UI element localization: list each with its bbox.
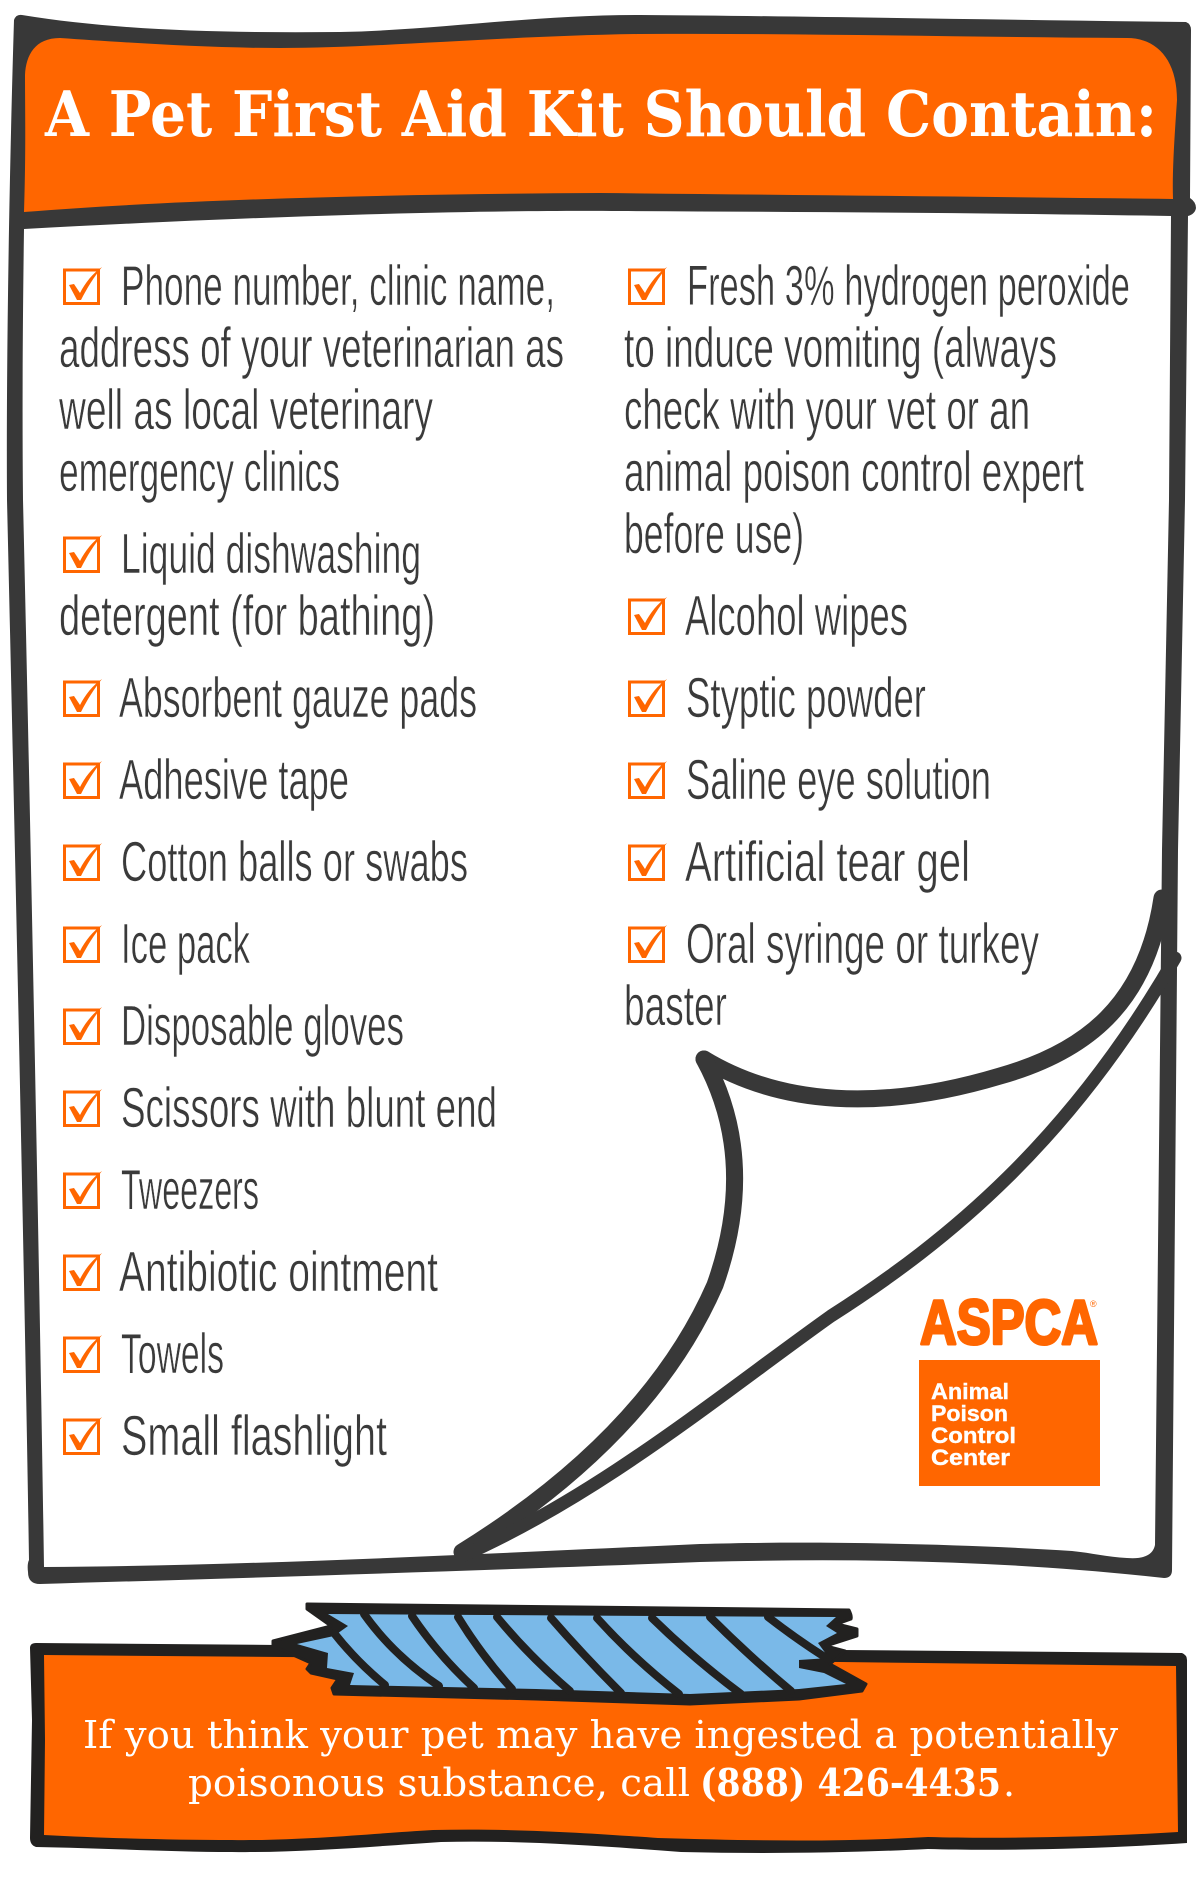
item: disposable gloves [64, 994, 404, 1058]
registered mark: ® [1090, 1299, 1097, 1309]
call-out text: poisonous substance, call [188, 1761, 690, 1805]
item: artificial tear gel [630, 830, 970, 894]
logo: ASPCA Animal Poison Control Center [919, 1288, 1100, 1486]
item: disposable gloves: Disposable gloves [121, 994, 404, 1058]
logo box text: Poison [931, 1401, 1008, 1426]
item: adhesive tape [64, 748, 349, 812]
item: cotton balls: Cotton balls or swabs [121, 830, 468, 894]
call-out text: If you think your pet may have ingested a potentially [83, 1713, 1119, 1757]
checklist: left column [58, 254, 564, 1468]
item: styptic powder: Styptic powder [686, 666, 926, 730]
item: scissors: Scissors with blunt end [121, 1076, 497, 1140]
item: ice pack: Ice pack [121, 912, 250, 976]
icon: blue masking tape [273, 1604, 866, 1704]
item: small flashlight: Small flashlight [121, 1404, 387, 1468]
item: gauze pads [64, 666, 477, 730]
item: saline eye solution [630, 748, 991, 812]
logo wordmark: ASPCA [920, 1288, 1098, 1358]
call-out text: . [1003, 1761, 1015, 1805]
item: towels [64, 1322, 224, 1386]
item: towels: Towels [121, 1322, 224, 1386]
item: scissors [64, 1076, 497, 1140]
item: phone number [58, 254, 564, 504]
item: dishwashing detergent: detergent (for bathing) [59, 584, 435, 648]
item: saline eye solution: Saline eye solution [686, 748, 991, 812]
panel: bottom call-out banner [30, 1643, 1187, 1853]
item: oral syringe [624, 912, 1039, 1038]
logo box text [931, 1379, 1016, 1470]
call-out text: (888) 426-4435 [700, 1760, 1001, 1805]
item: antibiotic ointment: Antibiotic ointment [119, 1240, 438, 1304]
item: phone number: well as local veterinary [58, 378, 433, 442]
checklist: right column [624, 254, 1130, 1038]
call-out text [83, 1713, 1119, 1805]
item: gauze pads: Absorbent gauze pads [119, 666, 477, 730]
item: tweezers: Tweezers [121, 1158, 259, 1222]
item: hydrogen peroxide: before use) [624, 502, 804, 566]
item: dishwashing detergent [59, 522, 435, 648]
item: oral syringe: baster [624, 974, 727, 1038]
item: adhesive tape: Adhesive tape [119, 748, 349, 812]
item: tweezers [64, 1158, 259, 1222]
item: phone number: Phone number, clinic name, [121, 254, 555, 318]
item: ice pack [64, 912, 250, 976]
illustration: curled page corner [462, 898, 1175, 1556]
item: artificial tear gel: Artificial tear gel [685, 830, 970, 894]
logo box text: Animal [931, 1379, 1009, 1404]
item: alcohol wipes: Alcohol wipes [685, 584, 908, 648]
panel: header banner [24, 34, 1177, 212]
item: alcohol wipes [630, 584, 908, 648]
item: hydrogen peroxide [624, 254, 1130, 566]
logo box [919, 1360, 1100, 1486]
item: phone number: emergency clinics [59, 440, 340, 504]
logo box text: Control [931, 1423, 1016, 1448]
item: cotton balls [64, 830, 468, 894]
item: phone number: address of your veterinarian as [59, 316, 564, 380]
item: dishwashing detergent: Liquid dishwashing [121, 522, 421, 586]
item: small flashlight [64, 1404, 387, 1468]
item: antibiotic ointment [64, 1240, 438, 1304]
item: styptic powder [630, 666, 926, 730]
logo box text: Center [931, 1445, 1010, 1470]
